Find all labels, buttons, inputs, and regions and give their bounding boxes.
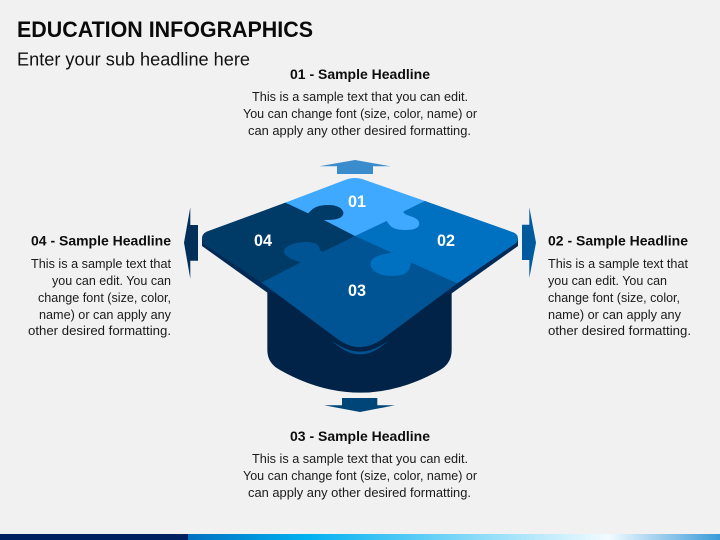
- smile curve: [331, 340, 389, 354]
- text block: 04: you can edit. You can: [52, 273, 171, 288]
- cap board edge: [202, 238, 518, 293]
- title: EDUCATION INFOGRAPHICS: [17, 17, 313, 42]
- text block: 03: You can change font (size, color, name) or: [243, 468, 478, 483]
- text block: 04: change font (size, color,: [38, 290, 171, 305]
- text block: 02: other desired formatting.: [548, 323, 691, 338]
- puzzle piece 03: [213, 201, 513, 347]
- cap base: [267, 283, 452, 393]
- panel: 02 sample text: [548, 232, 691, 338]
- text block: 04: other desired formatting.: [28, 323, 171, 338]
- text block: 02: change font (size, color,: [548, 290, 680, 305]
- heading: 04: 04 - Sample Headline: [31, 232, 171, 248]
- footer bar: [0, 534, 720, 540]
- heading: 03: 03 - Sample Headline: [290, 428, 430, 444]
- text block: 03: can apply any other desired formatting.: [248, 485, 471, 500]
- text block: 01: This is a sample text that you can edit.: [252, 89, 468, 104]
- text block: 04: This is a sample text that: [31, 256, 171, 271]
- text block: 04: [28, 256, 171, 338]
- heading: 02: 02 - Sample Headline: [548, 232, 688, 248]
- puzzle piece 02: [355, 201, 518, 283]
- text block: 02: This is a sample text that: [548, 256, 688, 271]
- text block: 02: [548, 256, 691, 338]
- text block: 01: You can change font (size, color, name) or: [243, 106, 478, 121]
- puzzle piece 04: [202, 203, 355, 283]
- arrow: down: [324, 398, 395, 412]
- text block: 04: name) or can apply any: [39, 307, 171, 322]
- text block: 03: This is a sample text that you can edit.: [252, 451, 468, 466]
- text block: 01: [243, 89, 478, 138]
- panel: 01 sample text: [243, 66, 478, 138]
- number 02: 02: [437, 232, 455, 250]
- number 01: 01: [348, 193, 366, 211]
- arrow: left: [184, 207, 198, 279]
- heading: 01: 01 - Sample Headline: [290, 66, 430, 82]
- graduation cap puzzle: [202, 178, 518, 393]
- text block: 02: you can edit. You can: [548, 273, 667, 288]
- puzzle piece 01: [285, 178, 425, 236]
- arrow: right: [522, 207, 536, 278]
- text block: 02: name) or can apply any: [548, 307, 681, 322]
- number 04: 04: [254, 232, 273, 250]
- panel: 04 sample text: [28, 232, 171, 338]
- arrow: up: [319, 160, 391, 174]
- text block: 01: can apply any other desired formatting.: [248, 123, 471, 138]
- subtitle: Enter your sub headline here: [17, 50, 250, 70]
- panel: 03 sample text: [243, 428, 478, 500]
- text block: 03: [243, 451, 478, 500]
- number 03: 03: [348, 282, 366, 300]
